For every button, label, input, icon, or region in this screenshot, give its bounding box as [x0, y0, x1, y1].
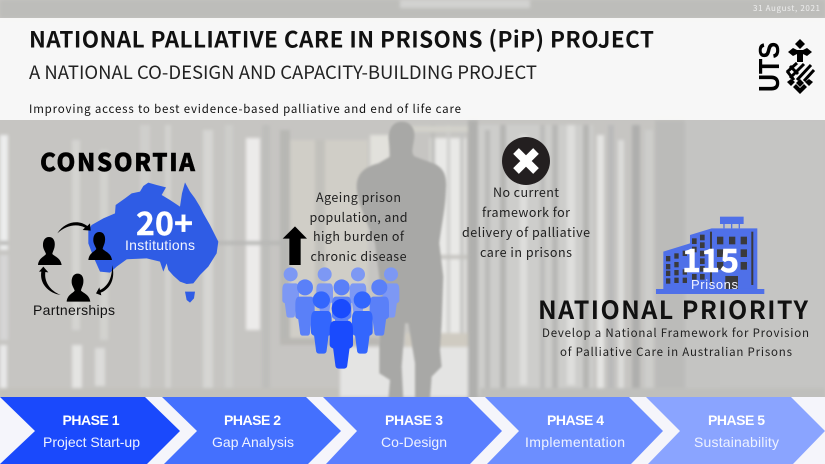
- map: Australia with institutions count: Institutions: [125, 237, 195, 253]
- heading: national priority: NATIONAL PRIORITY: [538, 291, 808, 327]
- label: partnerships: Partnerships: [33, 302, 115, 318]
- header panel: [0, 18, 825, 120]
- text: no current framework: care in prisons: [480, 242, 572, 261]
- text: national framework: of Palliative Care in Australian Prisons: [560, 344, 792, 360]
- phase 5: [646, 397, 825, 464]
- text: national framework: [542, 325, 809, 360]
- text: no current framework: delivery of palliative: [462, 222, 590, 241]
- icon: prison building with count: 115: [682, 236, 739, 282]
- icon: no framework cross: [502, 137, 550, 185]
- icon: up arrow: [283, 226, 307, 265]
- icon: partnership cycle: [38, 222, 113, 302]
- text: no current framework: No current: [493, 182, 559, 201]
- icon: UTS logo: [754, 39, 814, 94]
- phase 5: Sustainability: [694, 434, 779, 450]
- text: ageing prison population: population, and: [310, 207, 408, 226]
- map: Australia with institutions count: 20+: [136, 199, 193, 245]
- phase 2: PHASE 2: [224, 412, 281, 428]
- icon: prison building with count: Prisons: [691, 277, 738, 292]
- text: ageing prison population: [310, 187, 408, 265]
- icon: crowd of people: [282, 267, 399, 369]
- text: ageing prison population: high burden of: [313, 226, 405, 245]
- tagline: Improving access to best evidence-based palliative and end of life care: [29, 101, 461, 117]
- icon: prison building with count: [656, 217, 764, 294]
- phase 1: Project Start-up: [43, 434, 140, 450]
- phase 4: PHASE 4: [547, 412, 604, 428]
- text: ageing prison population: chronic disease: [310, 246, 407, 265]
- icon: UTS logo: UTS: [754, 42, 786, 92]
- text: national framework: Develop a National Framework for Provision: [542, 325, 809, 341]
- date: 31 August, 2021: [753, 3, 820, 14]
- silhouette: [357, 122, 446, 400]
- phase 4: Implementation: [525, 434, 625, 450]
- phase 3: Co-Design: [381, 434, 447, 450]
- phase 2: Gap Analysis: [212, 434, 294, 450]
- subtitle: A NATIONAL CO-DESIGN AND CAPACITY-BUILDING PROJECT: [29, 59, 537, 85]
- phase 2: [162, 397, 341, 464]
- text: no current framework: [462, 182, 590, 261]
- heading: consortia: CONSORTIA: [40, 143, 196, 178]
- phase 4: [485, 397, 663, 464]
- map: Australia with institutions count: [88, 182, 218, 303]
- phase 1: PHASE 1: [62, 412, 120, 428]
- phase 1: [0, 397, 180, 464]
- phase 3: [323, 397, 502, 464]
- text: no current framework: framework for: [482, 202, 570, 221]
- text: ageing prison population: Ageing prison: [316, 187, 401, 206]
- phase 3: PHASE 3: [385, 412, 443, 428]
- phase 5: PHASE 5: [708, 412, 765, 428]
- panel: project phases: [0, 397, 825, 464]
- title: NATIONAL PALLIATIVE CARE IN PRISONS (PiP) PROJECT: [29, 22, 654, 54]
